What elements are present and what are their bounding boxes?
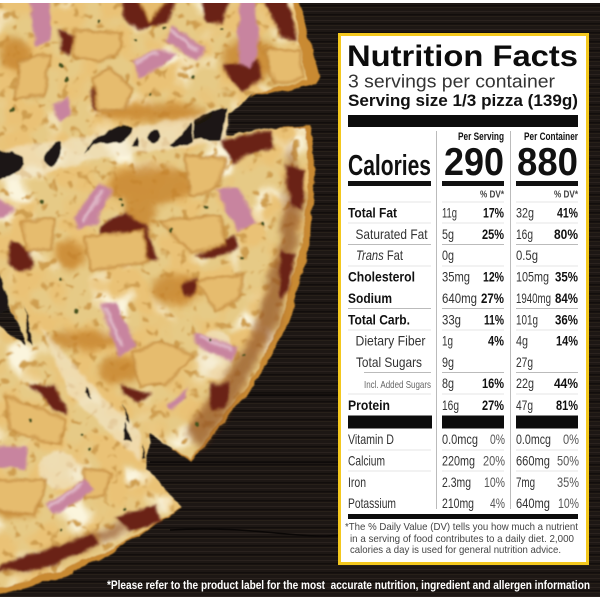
row: added sugars: 22g: [516, 375, 534, 391]
row: potassium: 640mg: [516, 495, 550, 511]
row: protein: Protein: [348, 397, 390, 413]
row: total carbohydrate: 101g: [516, 312, 538, 328]
row: calcium: 20%: [483, 452, 505, 468]
nutrient rows: [348, 204, 578, 413]
row: total carbohydrate: 11%: [484, 312, 504, 328]
percent daily value headers: % DV*: [554, 190, 578, 200]
header bar: [348, 115, 578, 127]
row: sodium: 84%: [555, 290, 578, 306]
row: cholesterol: 35mg: [442, 268, 470, 284]
column headings: Per Container: [524, 131, 579, 143]
row: total sugars: 27g: [516, 354, 533, 370]
row: vitamin d: [348, 431, 579, 447]
row: cholesterol: 35%: [555, 268, 578, 284]
row: dietary fiber: [356, 332, 578, 348]
row: protein: 16g: [442, 397, 459, 413]
row: iron: 7mg: [516, 474, 535, 490]
row: potassium: 10%: [558, 495, 579, 511]
row: saturated fat: [356, 226, 578, 242]
row: iron: [348, 474, 579, 490]
row: iron: 10%: [484, 474, 505, 490]
onion highlights: [48, 30, 232, 508]
pizza photo: [0, 0, 330, 600]
row: total fat: [348, 204, 578, 220]
separator bars: [348, 416, 578, 428]
row: total sugars: 9g: [442, 354, 454, 370]
calories: Calories: [348, 150, 431, 182]
row: saturated fat: 16g: [516, 226, 533, 242]
row: vitamin d: 0%: [490, 431, 505, 447]
row: sodium: 1940mg: [516, 290, 551, 306]
row: protein: [348, 397, 578, 413]
servings per container: 3 servings per container: [348, 72, 555, 92]
row: added sugars: 8g: [442, 375, 454, 391]
row: protein: 27%: [482, 397, 504, 413]
row: saturated fat: 25%: [482, 226, 504, 242]
row: trans fat: 0.5g: [516, 247, 538, 263]
row: vitamin d: Vitamin D: [348, 431, 394, 447]
serving size: Serving size 1/3 pizza (139g): [348, 91, 578, 110]
row: cholesterol: [348, 268, 578, 284]
daily value footnote: in a serving of food contributes to a daily diet. 2,000: [350, 533, 574, 545]
cheese bases: [0, 0, 310, 592]
row: total carbohydrate: 33g: [442, 312, 461, 328]
row: total sugars: [356, 354, 533, 370]
daily value footnote: *The % Daily Value (DV) tells you how much a nutrient: [345, 521, 578, 533]
row: calcium: 220mg: [442, 452, 475, 468]
row: sodium: 640mg: [442, 290, 477, 306]
row: potassium: 210mg: [442, 495, 474, 511]
row: dietary fiber: 4%: [488, 332, 504, 348]
row: total fat: 11g: [442, 204, 457, 220]
row: iron: 2.3mg: [442, 474, 471, 490]
calories: [348, 141, 578, 186]
row: saturated fat: 80%: [554, 226, 578, 242]
daily value footnote: [345, 521, 578, 556]
nutrition facts panel: [340, 34, 588, 564]
stretched cheese highlights: [0, 108, 233, 488]
red onion pieces: [0, 0, 259, 515]
row: iron: 35%: [557, 474, 579, 490]
cheese mottling: [0, 0, 330, 600]
herb specks: [10, 18, 264, 532]
row: vitamin d: 0.0mcg: [516, 431, 551, 447]
chicken pieces: [0, 0, 302, 515]
row: dietary fiber: 14%: [556, 332, 578, 348]
row: calcium: 50%: [557, 452, 579, 468]
row: dietary fiber: 4g: [516, 332, 528, 348]
row: saturated fat: Saturated Fat: [356, 226, 428, 242]
row: total fat: 17%: [483, 204, 504, 220]
row: total carbohydrate: Total Carb.: [348, 312, 410, 328]
barbecue sauce: [0, 0, 305, 570]
row: total sugars: Total Sugars: [356, 354, 422, 370]
row: calcium: [348, 452, 579, 468]
row: cholesterol: 12%: [483, 268, 504, 284]
row: dietary fiber: Dietary Fiber: [356, 332, 426, 348]
row: total fat: 32g: [516, 204, 534, 220]
title: Nutrition Facts: [347, 40, 578, 73]
row: total fat: Total Fat: [348, 204, 397, 220]
holes between slices: [0, 107, 228, 458]
row: dietary fiber: 1g: [442, 332, 453, 348]
row: added sugars: 16%: [482, 375, 504, 391]
calories: 880: [517, 141, 578, 184]
percent daily value headers: [480, 190, 578, 200]
row: added sugars: [364, 375, 578, 391]
row: sodium: 27%: [481, 290, 504, 306]
row: added sugars: Incl. Added Sugars: [364, 379, 431, 391]
row: protein: 47g: [516, 397, 533, 413]
row: iron: Iron: [348, 474, 366, 490]
row: trans fat: 0g: [442, 247, 454, 263]
footer bar: [348, 514, 578, 519]
column headings: Per Serving: [458, 131, 504, 143]
row: cholesterol: 105mg: [516, 268, 549, 284]
row: trans fat: [356, 247, 538, 263]
row: calcium: Calcium: [348, 452, 385, 468]
row: total fat: 41%: [557, 204, 578, 220]
browned cheese patches: [0, 37, 278, 518]
row: trans fat: Trans Fat: [356, 247, 403, 263]
row: sodium: [348, 290, 578, 306]
vitamins and minerals: [348, 431, 579, 511]
crusts: [0, 0, 320, 598]
calories: 290: [444, 141, 504, 184]
column headings: [458, 131, 579, 143]
row: calcium: 660mg: [516, 452, 550, 468]
row: vitamin d: 0.0mcg: [442, 431, 478, 447]
daily value footnote: calories a day is used for general nutrition advice.: [350, 544, 561, 556]
row: added sugars: 44%: [554, 375, 578, 391]
row: potassium: Potassium: [348, 495, 396, 511]
row: potassium: [348, 495, 579, 511]
row: cholesterol: Cholesterol: [348, 268, 415, 284]
row: protein: 81%: [556, 397, 578, 413]
row rules: [348, 202, 578, 471]
row: vitamin d: 0%: [563, 431, 579, 447]
row: saturated fat: 5g: [442, 226, 454, 242]
row: total carbohydrate: [348, 312, 578, 328]
column dividers: [436, 131, 510, 509]
row: potassium: 4%: [490, 495, 505, 511]
row: sodium: Sodium: [348, 290, 392, 306]
percent daily value headers: % DV*: [480, 190, 504, 200]
row: total carbohydrate: 36%: [555, 312, 578, 328]
crust-side sauce shadow: [0, 140, 305, 570]
